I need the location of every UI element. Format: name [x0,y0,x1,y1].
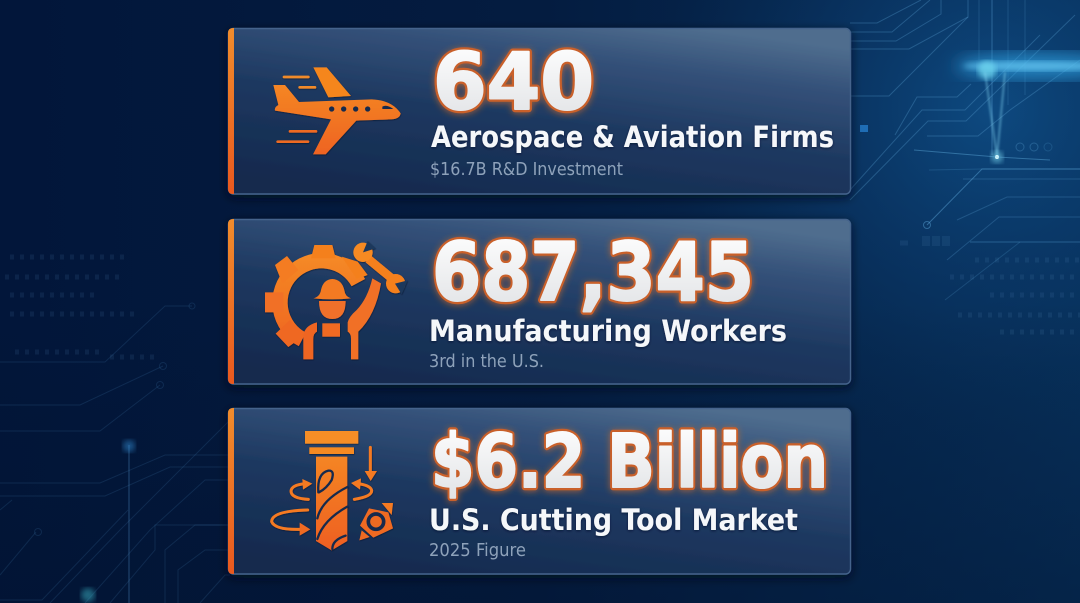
icon: gear with worker and wrench [265,241,408,359]
background circuit lines, upper right [850,0,1080,300]
rotation and feed arrows [272,447,372,529]
orange accent bar [228,408,234,574]
stat: 640: 640 [433,38,594,128]
orange accent bar [228,28,234,194]
stat: 640: 640 [433,38,594,128]
card background [228,28,850,194]
worker figure [303,278,381,359]
icon: airplane [273,67,401,154]
note: 2025 figure: 2025 Figure [429,541,526,561]
label: U.S. Cutting Tool Market: U.S. Cutting Tool Market [429,503,798,537]
panel: aerospace and aviation firms [228,28,850,194]
flutes [317,471,347,549]
stat: $6.2 Billion: $6.2 Billion [431,419,828,505]
background data dots [5,241,1080,357]
stat: 687,345: 687,345 [432,226,754,319]
cutting insert [360,508,393,538]
orange accent bar [228,219,234,384]
card background [228,408,850,574]
wrench [368,259,392,278]
panel: manufacturing workers [228,219,850,384]
panel: U.S. cutting tool market [228,408,850,574]
icon: end mill cutting tool with arrows [272,431,393,550]
card background [228,220,850,384]
stat: $6.2 Billion: $6.2 Billion [431,419,828,505]
label: Aerospace and Aviation Firms: Aerospace & Aviation Firms [431,120,834,154]
note: third in the U.S.: 3rd in the U.S. [429,352,544,372]
background circuit lines, lower left [0,303,230,603]
note: R and D investment: $16.7B R&D Investment [430,160,623,180]
label: Manufacturing Workers: Manufacturing Workers [429,314,787,348]
stat: 687,345: 687,345 [432,226,754,319]
